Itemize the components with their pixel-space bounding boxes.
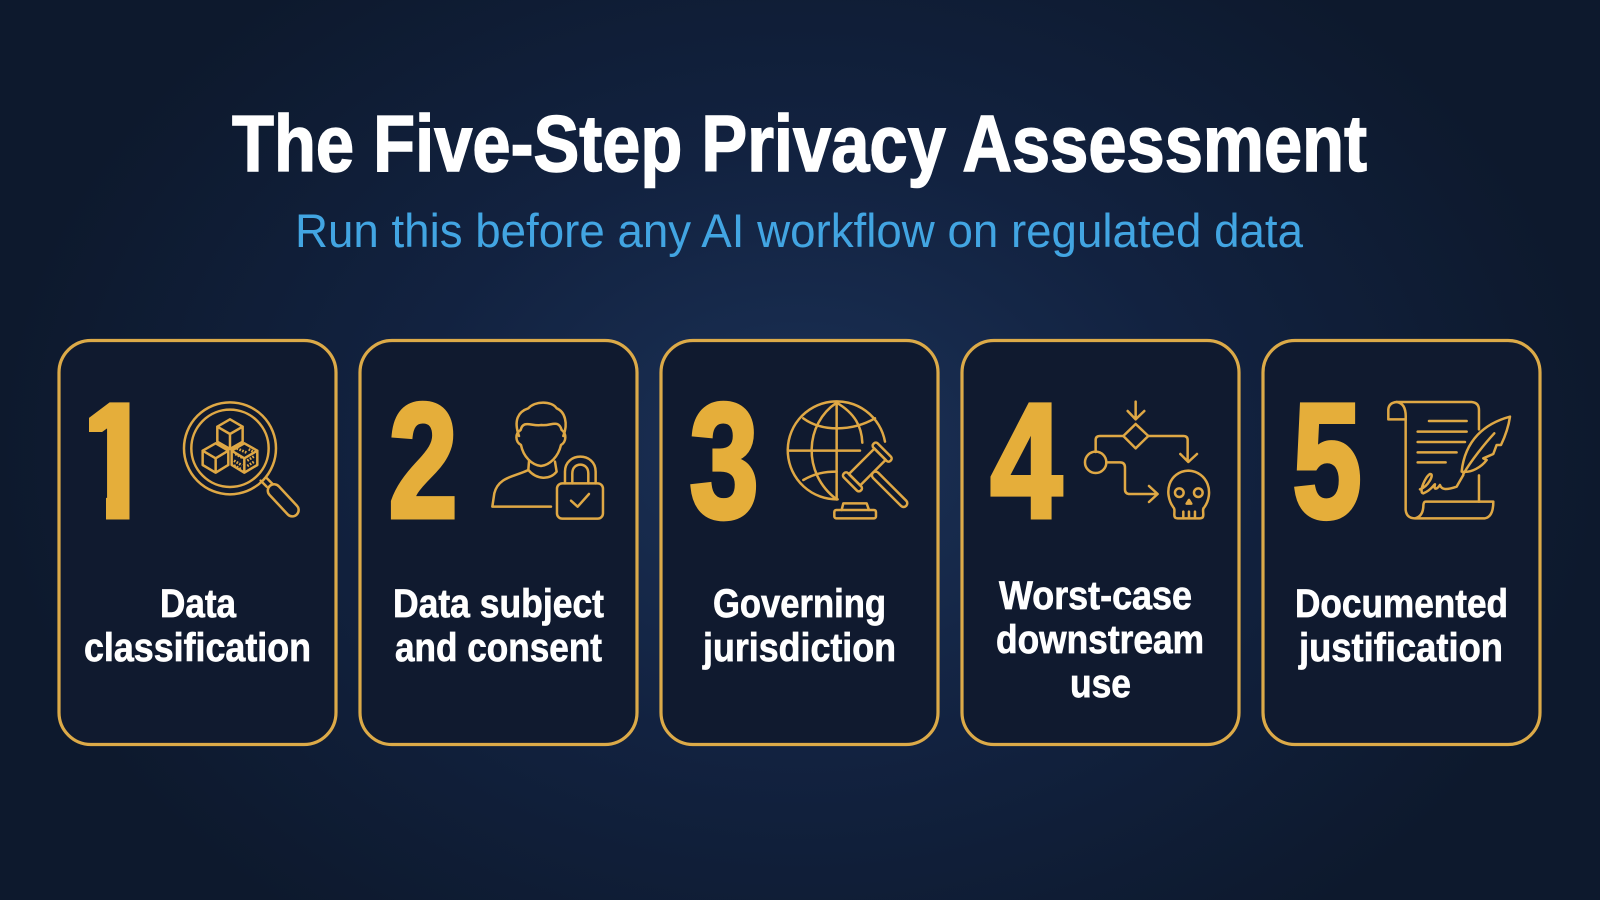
label: Worst-case bbox=[999, 574, 1192, 618]
number 1: 1 bbox=[76, 370, 154, 552]
label bbox=[84, 582, 311, 670]
label: classification bbox=[84, 626, 311, 670]
label: Documented bbox=[1295, 582, 1508, 626]
number 4: 4 bbox=[990, 371, 1062, 553]
label bbox=[1295, 582, 1508, 670]
label: Governing bbox=[713, 582, 886, 626]
icon: flowchart ending in skull bbox=[1085, 402, 1209, 518]
number 2: 2 bbox=[388, 370, 458, 552]
subtitle: Run this before any AI workflow on regulated data bbox=[295, 205, 1304, 258]
card frame bbox=[661, 340, 938, 744]
label: Data subject bbox=[393, 582, 604, 626]
label: use bbox=[1070, 662, 1131, 706]
label: jurisdiction bbox=[702, 626, 896, 670]
icon: scroll with quill bbox=[1388, 402, 1510, 518]
card frame bbox=[59, 340, 336, 744]
icon: globe with gavel bbox=[788, 401, 923, 523]
number 3: 3 bbox=[690, 370, 759, 552]
panel: step 4 worst-case downstream use bbox=[962, 340, 1239, 744]
panel: step 2 data subject and consent bbox=[360, 340, 637, 744]
label: justification bbox=[1298, 626, 1503, 670]
icon: magnifier over data cubes bbox=[184, 402, 301, 519]
card frame bbox=[962, 340, 1239, 744]
title: The Five-Step Privacy Assessment bbox=[232, 99, 1367, 188]
card frame bbox=[360, 340, 637, 744]
card frame bbox=[1263, 340, 1540, 744]
panel: step 1 data classification bbox=[59, 340, 336, 744]
label: downstream bbox=[996, 618, 1204, 662]
icon: person with padlock bbox=[492, 403, 603, 519]
label: Data bbox=[160, 582, 237, 626]
label bbox=[702, 582, 896, 670]
label: and consent bbox=[395, 626, 602, 670]
label bbox=[996, 574, 1204, 706]
panel: step 3 governing jurisdiction bbox=[661, 340, 938, 744]
number 5: 5 bbox=[1292, 370, 1362, 552]
label bbox=[393, 582, 604, 670]
panel: step 5 documented justification bbox=[1263, 340, 1540, 744]
